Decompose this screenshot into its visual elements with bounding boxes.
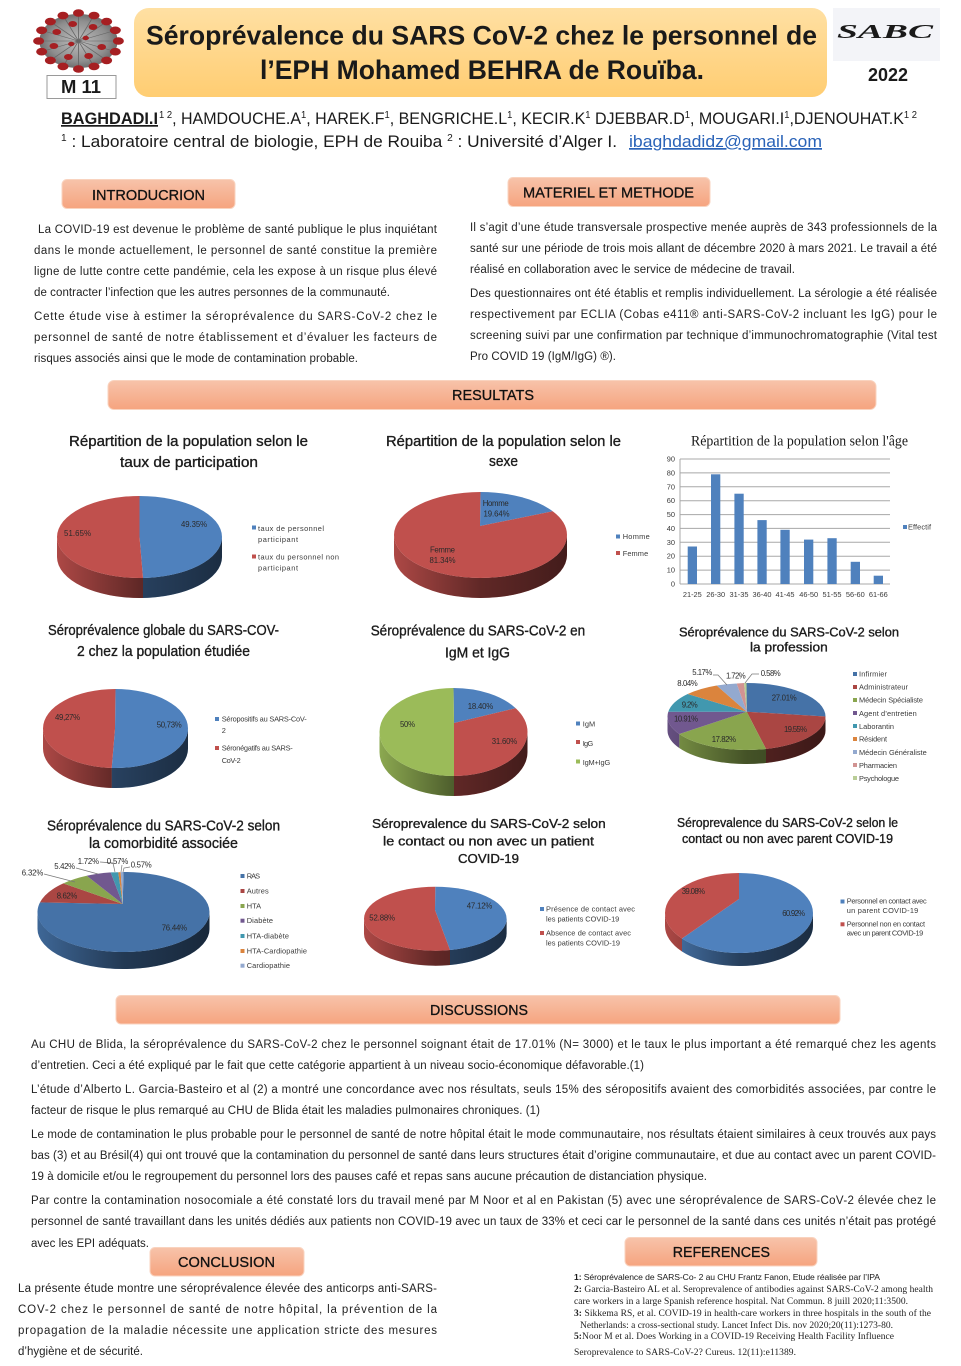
text: introduction: ligne de lutte contre cette pandémie, cela les expose à un risque plus élevé xyxy=(34,266,437,278)
authors xyxy=(61,109,917,128)
authors: 1 xyxy=(784,110,790,121)
chart: seroprevalence globale: 2 xyxy=(222,726,226,735)
chart: contact patient: les patients COVID-19 xyxy=(546,915,619,924)
chart: seroprevalence globale: CoV-2 xyxy=(222,756,241,765)
chart: comorbidite: 0.57% xyxy=(107,857,128,866)
text: materiel et methode xyxy=(470,222,938,363)
text: conclusion: COV-2 chez le personnel de santé de notre hôpital, la prévention de la xyxy=(18,1304,438,1316)
bar chart: age: 41-45 xyxy=(776,590,794,599)
chart: comorbidite: la comorbidité associée xyxy=(89,836,238,852)
chart: comorbidite: HTA-Cardiopathie xyxy=(247,946,307,956)
chart: taux de participation: taux de personnel xyxy=(258,524,324,533)
text: references: Seroprevalence to SARS-CoV-2? Cureus. 12(11):e11389. xyxy=(574,1347,796,1358)
chart: comorbidite: RAS xyxy=(247,872,260,880)
chart: profession: 10.91% xyxy=(674,715,698,724)
heading: resultats xyxy=(108,380,876,410)
chart: profession: Résident xyxy=(859,734,887,744)
heading: conclusion xyxy=(150,1248,304,1276)
chart: profession: 8.04% xyxy=(677,679,698,688)
affiliations: 2 xyxy=(447,133,453,144)
chart: sexe: Femme xyxy=(430,546,455,555)
bar chart: age: 31-35 xyxy=(730,590,748,599)
authors: 1 2 xyxy=(159,110,172,121)
chart: contact patient: Absence de contact avec xyxy=(546,928,631,938)
chart: profession: Infirmier xyxy=(859,670,888,678)
chart: profession: 0.58% xyxy=(761,669,781,678)
chart: taux de participation: 49.35% xyxy=(181,520,207,529)
chart: IgM et IgG: IgG xyxy=(583,739,593,748)
text: discussions: Au CHU de Blida, la séroprévalence du SARS-CoV-2 chez le personnel soignant était de 17.01% (N= 3000) et le taux le plus important a été remarqué chez les agents xyxy=(31,1039,936,1051)
bar chart: age: 20 xyxy=(667,552,675,561)
bar chart: age: Effectif xyxy=(908,522,932,532)
chart: profession: 19.55% xyxy=(784,725,807,734)
authors: , HAMDOUCHE.A xyxy=(172,109,302,128)
text: references: 3: Sikkema RS, et al. COVID-19 in health-care workers in three hospitals in the south of the xyxy=(574,1308,931,1319)
authors: ,DJENOUHAT.K xyxy=(789,109,905,128)
chart: taux de participation: participant xyxy=(258,535,298,544)
chart: profession: Agent d’entretien xyxy=(859,709,917,718)
text: discussions: Par contre la contamination nosocomiale a été constaté lors du travail mené par M Noor et al en Pakistan (5) avec une séroprévalence de SARS-CoV-2 élevée chez le xyxy=(31,1195,936,1207)
chart: IgM et IgG: Séroprévalence du SARS-CoV-2 en xyxy=(371,624,585,640)
bar chart: age: 90 xyxy=(667,454,675,464)
chart: IgM et IgG: IgM+IgG xyxy=(583,758,610,767)
text: introduction: de contracter l’infection que les autres personnes de la communauté. xyxy=(34,287,390,299)
text: materiel et methode: respectivement par ECLIA (Cobas e411® anti-SARS-CoV-2 incluant les IgG) pour le xyxy=(470,309,937,321)
text: conclusion: propagation de la maladie nécessite une application stricte des mesures xyxy=(18,1325,437,1337)
chart: taux de participation: taux du personnel non xyxy=(258,552,339,562)
chart: contact parent: un parent COVID-19 xyxy=(847,906,918,915)
affiliations: ibaghdadidz@gmail.com xyxy=(629,132,822,151)
chart: contact parent: contact ou non avec parent COVID-19 xyxy=(682,832,893,846)
chart: contact parent: Personnel non en contact xyxy=(847,919,925,928)
text: discussions: bas (3) et au Brésil(4) qui ont trouvé que la contamination du personnel de santé dans leurs structures était d’origine communautaire, et due au contact avec un parent COVID- xyxy=(31,1150,936,1162)
text: discussions: personnel de santé travaillant dans les unités dédiés aux patients non COVID-19 avec un taux de 33% et ceci car le personnel de la santé dans ces unités n’était pas protégé xyxy=(31,1216,936,1228)
authors: 1 xyxy=(385,110,390,121)
bar chart: age: 21-25 xyxy=(683,590,702,599)
icon: coronavirus xyxy=(33,9,124,73)
chart: comorbidite: Séroprévalence du SARS-CoV-2 selon xyxy=(47,819,280,835)
bar chart: age: 56-60 xyxy=(846,590,865,599)
chart: seroprevalence globale: 2 chez la population étudiée xyxy=(77,644,250,660)
text: introduction xyxy=(34,224,438,365)
chart: IgM et IgG: 50% xyxy=(400,720,415,729)
text: introduction: personnel de santé de notre établissement et d’évaluer les facteurs de xyxy=(34,332,437,344)
chart: profession: 9.2% xyxy=(682,700,698,709)
logo SABC with year xyxy=(833,8,940,85)
chart: profession: Pharmacien xyxy=(859,761,897,770)
chart: comorbidite: 5.42% xyxy=(54,862,75,871)
chart: sexe: 81.34% xyxy=(430,556,456,565)
chart: seroprevalence globale: 50,73% xyxy=(157,721,182,730)
affiliations: : Laboratoire central de biologie, EPH de Rouiba xyxy=(67,132,447,151)
heading: introduction xyxy=(62,180,235,208)
heading: materiel et methode: MATERIEL ET METHODE xyxy=(523,186,694,202)
text: introduction: dans le monde actuellement, le personnel de santé constitue la première xyxy=(34,245,437,257)
chart: profession: 17.82% xyxy=(712,735,736,744)
text: introduction: risques associés ainsi que le mode de contamination probable. xyxy=(34,353,358,365)
text: references: 2: Garcia-Basteiro AL et al. Seroprevalence of antibodies against SARS-CoV-2 among health xyxy=(574,1284,933,1295)
chart: profession: Médecin Spécialiste xyxy=(859,696,923,704)
heading: references xyxy=(625,1238,817,1266)
bar chart: age: 0 xyxy=(671,580,675,588)
heading: introduction: INTRODUCRION xyxy=(92,188,205,204)
logo SABC with year: SABC xyxy=(837,21,934,43)
chart: comorbidite: Cardiopathie xyxy=(247,961,290,970)
bar chart: age: 60 xyxy=(667,496,675,505)
chart: comorbidite: 8.62% xyxy=(57,891,77,900)
bar chart: age xyxy=(667,434,932,599)
chart: sexe: Homme xyxy=(483,499,509,508)
chart: comorbidite: HTA xyxy=(247,902,261,910)
text: introduction: La COVID-19 est devenue le problème de santé publique le plus inquiétant xyxy=(38,224,438,236)
chart: comorbidite: 76.44% xyxy=(162,924,187,933)
text: conclusion xyxy=(18,1283,438,1358)
chart: IgM et IgG: 31.60% xyxy=(492,737,517,746)
text: discussions: 19 à domicile et/ou le regroupement du personnel lors des pauses café et repas sans aucune précaution de distanciation physique. xyxy=(31,1171,707,1183)
bar chart: age: 30 xyxy=(667,538,675,547)
authors: DJEBBAR.D xyxy=(591,109,685,128)
chart: seroprevalence globale: Séronégatifs au SARS- xyxy=(222,744,293,752)
chart: sexe xyxy=(386,434,650,598)
chart: contact patient: le contact ou non avec un patient xyxy=(383,835,595,849)
chart: seroprevalence globale xyxy=(43,623,307,788)
chart: contact patient: COVID-19 xyxy=(458,852,519,866)
bar chart: age: 51-55 xyxy=(823,590,841,599)
authors: 1 xyxy=(301,110,307,121)
text: references: Netherlands: a cross-sectional study. Lancet Infect Dis. nov 2020;20(11):1273-80. xyxy=(580,1320,893,1331)
authors: BAGHDADI.I xyxy=(61,109,158,128)
authors: 1 2 xyxy=(904,110,917,121)
chart: sexe: Femme xyxy=(623,549,648,558)
heading: materiel et methode xyxy=(508,178,710,206)
chart: contact patient: Présence de contact avec xyxy=(546,904,635,914)
chart: sexe: Homme xyxy=(623,532,650,541)
poster code M 11: M 11 xyxy=(61,77,101,97)
chart: taux de participation: 51.65% xyxy=(64,529,91,538)
chart: comorbidite: Diabète xyxy=(247,916,273,925)
authors: 1 xyxy=(585,110,591,121)
chart: profession xyxy=(668,626,927,783)
chart: taux de participation: taux de participation xyxy=(120,455,258,471)
chart: contact patient: les patients COVID-19 xyxy=(546,938,620,948)
chart: taux de participation xyxy=(57,434,339,598)
chart: contact patient: 52.88% xyxy=(369,914,395,923)
affiliations: : Université d’Alger I. xyxy=(453,132,617,151)
chart: sexe: 19.64% xyxy=(484,510,510,519)
chart: seroprevalence globale: Séroprévalence globale du SARS-COV- xyxy=(48,623,279,639)
chart: seroprevalence globale: 49,27% xyxy=(55,713,80,722)
chart: comorbidite: Autres xyxy=(247,886,269,896)
bar chart: age: 80 xyxy=(667,468,675,477)
heading: references: REFERENCES xyxy=(673,1245,770,1261)
bar chart: age: 70 xyxy=(667,482,675,491)
authors: 1 xyxy=(507,110,513,121)
chart: contact parent: 60.92% xyxy=(782,909,805,918)
text: conclusion: d’hygiène et de sécurité. xyxy=(18,1346,143,1358)
heading: discussions xyxy=(116,996,840,1024)
authors: 1 xyxy=(685,110,690,121)
affiliations: 1 xyxy=(61,133,67,144)
chart: profession: Administrateur xyxy=(859,682,909,692)
chart: profession: la profession xyxy=(750,641,828,655)
chart: contact parent: Personnel en contact avec xyxy=(847,897,927,906)
chart: IgM et IgG: 18.40% xyxy=(468,702,493,711)
affiliations xyxy=(61,132,822,151)
chart: sexe: Répartition de la population selon le xyxy=(386,434,621,450)
chart: profession: 5.17% xyxy=(692,668,712,677)
text: discussions: L’étude d’Alberto L. Garcia-Basteiro et al (2) a montré une concordance avec nos résultats, seuls 15% des séropositifs avaient des comorbidités associées, par contre le xyxy=(31,1084,936,1096)
chart: IgM et IgG: IgM et IgG xyxy=(445,646,510,662)
chart: taux de participation: Répartition de la population selon le xyxy=(69,434,308,450)
heading: conclusion: CONCLUSION xyxy=(178,1255,275,1271)
chart: contact parent: avec un parent COVID-19 xyxy=(847,928,923,938)
chart: profession: Psychologue xyxy=(859,774,899,783)
text: discussions xyxy=(31,1039,936,1250)
text: references: 1: Séroprévalence de SARS-Co- 2 au CHU Frantz Fanon, Etude réalisée par l’IPA xyxy=(574,1272,880,1282)
chart: taux de participation: participant xyxy=(258,564,298,572)
chart: comorbidite: HTA-diabète xyxy=(247,932,289,940)
text: materiel et methode: Des questionnaires ont été établis et remplis individuellement. La sérologie a été réalisée xyxy=(470,288,937,300)
title banner: l’EPH Mohamed BEHRA de Rouïba. xyxy=(260,55,704,85)
logo SABC with year: 2022 xyxy=(868,65,908,85)
chart: comorbidite: 6.32% xyxy=(22,869,43,878)
bar chart: age: 50 xyxy=(667,510,675,519)
text: materiel et methode: réalisé en collaboration avec le service de médecine de travail. xyxy=(470,264,795,276)
text: references: care workers in a large Spanish reference hospital. Nat Commun. 8 juill 2020;11:3500. xyxy=(574,1296,908,1307)
chart: comorbidite xyxy=(22,819,307,970)
bar chart: age: 40 xyxy=(667,524,675,533)
text: materiel et methode: santé sur une période de trois mois allant de décembre 2020 à mars 2021. Le travail a été xyxy=(470,243,937,255)
text: materiel et methode: screening suivi par une confirmation par technique d’immunochromatographie (Vital test xyxy=(470,330,938,342)
chart: contact patient xyxy=(364,817,635,966)
authors: , BENGRICHE.L xyxy=(390,109,507,128)
text: references: 5:Noor M et al. Does Working in a COVID-19 Receiving Health Facility Influence xyxy=(574,1331,894,1342)
chart: profession: 27.01% xyxy=(772,694,797,703)
chart: IgM et IgG: IgM xyxy=(583,720,595,729)
chart: profession: Médecin Généraliste xyxy=(859,748,927,757)
authors: , KECIR.K xyxy=(512,109,586,128)
heading: discussions: DISCUSSIONS xyxy=(430,1003,528,1019)
bar chart: age: 36-40 xyxy=(753,590,771,599)
chart: contact parent: Séroprevalence du SARS-CoV-2 selon le xyxy=(677,816,898,830)
chart: profession: Laborantin xyxy=(859,722,894,731)
title banner xyxy=(134,8,827,97)
chart: IgM et IgG xyxy=(371,624,610,796)
chart: sexe: sexe xyxy=(489,454,518,470)
bar chart: age: Répartition de la population selon l'âge xyxy=(691,434,908,450)
chart: profession: 1.72% xyxy=(726,671,746,680)
text: materiel et methode: Il s’agit d’une étude transversale prospective menée auprès de 343 professionnels de la xyxy=(470,222,938,234)
bar chart: age: 26-30 xyxy=(706,590,725,599)
chart: seroprevalence globale: Séropositifs au SARS-CoV- xyxy=(222,715,307,724)
bar chart: age: 61-66 xyxy=(869,590,888,599)
bar chart: age: 46-50 xyxy=(799,590,818,599)
text: discussions: d’entretien. Ceci a été expliqué par le fait que cette catégorie appartient à un niveau socio-économique défavorable.(1) xyxy=(31,1060,644,1072)
chart: comorbidite: 0.57% xyxy=(131,861,152,870)
text: materiel et methode: Pro COVID 19 (IgM/IgG) ®). xyxy=(470,351,616,363)
authors: , HAREK.F xyxy=(306,109,385,128)
chart: contact patient: Séroprevalence du SARS-CoV-2 selon xyxy=(372,817,606,831)
title banner: Séroprévalence du SARS CoV-2 chez le personnel de xyxy=(146,20,817,50)
authors: , MOUGARI.I xyxy=(690,109,784,128)
chart: comorbidite: 1.72% xyxy=(78,857,99,866)
text: introduction: Cette étude vise à estimer la séroprévalence du SARS-CoV-2 chez le xyxy=(34,311,437,323)
chart: profession: Séroprévalence du SARS-CoV-2 selon xyxy=(679,626,899,640)
text: references xyxy=(574,1272,933,1358)
chart: contact parent xyxy=(665,816,927,966)
poster code M 11 xyxy=(47,76,116,98)
text: discussions: facteur de risque le plus remarqué au CHU de Blida était les maladies pulmonaires chroniques. (1) xyxy=(31,1105,540,1117)
text: conclusion: La présente étude montre une séroprévalence élevée des anticorps anti-SARS- xyxy=(18,1283,437,1295)
text: discussions: avec les EPI adéquats. xyxy=(31,1238,149,1250)
chart: contact patient: 47.12% xyxy=(467,901,492,910)
text: discussions: Le mode de contamination le plus probable pour le personnel de santé de notre hôpital était le mode communautaire, nos résultats étaient similaires à ceux trouvés aux pays xyxy=(31,1129,936,1141)
chart: contact parent: 39.08% xyxy=(682,887,705,896)
bar chart: age: 10 xyxy=(667,566,675,575)
heading: resultats: RESULTATS xyxy=(452,388,534,404)
